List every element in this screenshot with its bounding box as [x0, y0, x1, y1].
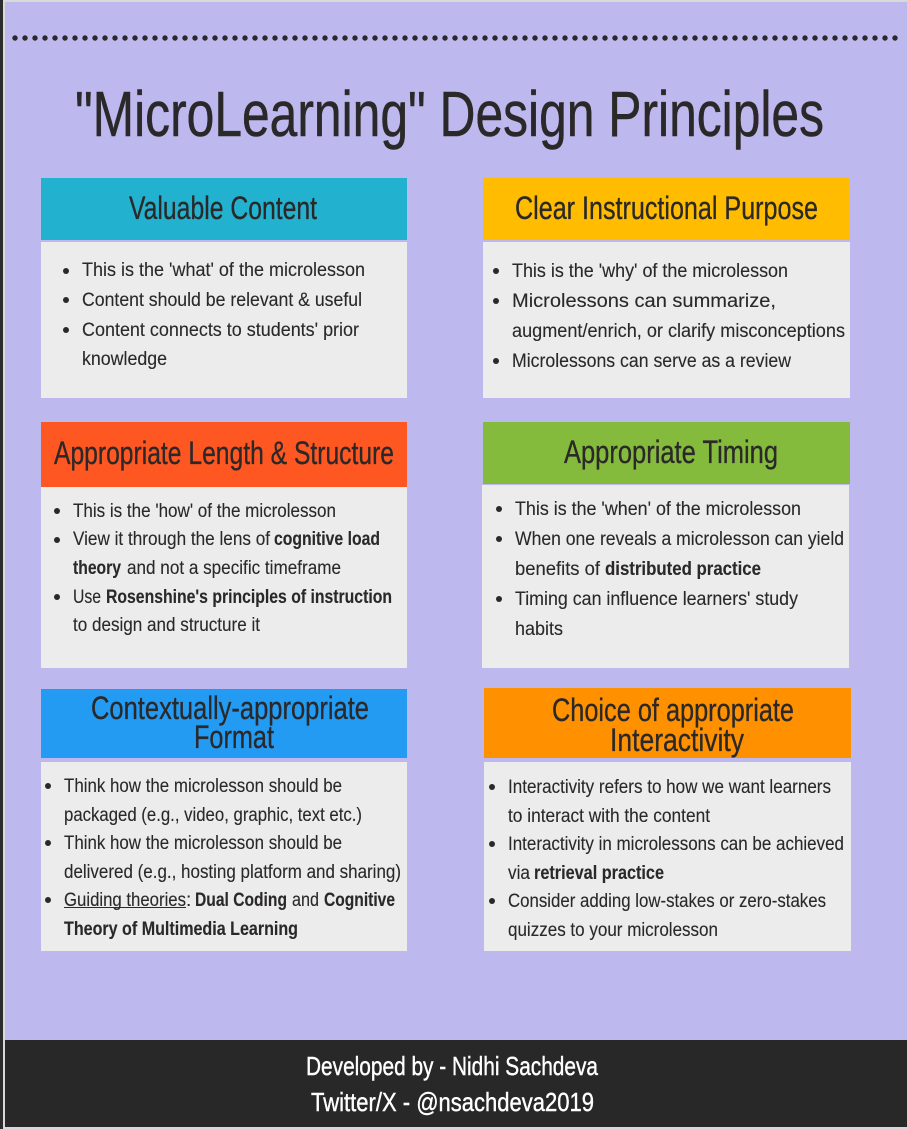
body: Clear Instructional Purpose: augment/enrich, or clarify misconceptions	[512, 321, 845, 342]
body: Appropriate Length & Structure	[41, 487, 407, 668]
body: Appropriate Length & Structure: Rosenshine's principles of instruction	[106, 587, 392, 608]
body: Contextually-appropriate Format: delivered (e.g., hosting platform and sharing)	[64, 862, 401, 883]
body: Appropriate Timing: When one reveals a microlesson can yield	[515, 529, 844, 550]
body: Appropriate Timing	[482, 485, 849, 668]
header: Valuable Content: Valuable Content	[129, 190, 317, 226]
header: Clear Instructional Purpose: Clear Instructional Purpose	[515, 190, 818, 226]
header: Clear Instructional Purpose	[483, 178, 850, 240]
header: Choice of appropriate Interactivity	[484, 688, 851, 758]
body: Choice of appropriate Interactivity: retrieval practice	[534, 863, 664, 884]
header: Contextually-appropriate Format: Format	[194, 719, 274, 755]
body: Clear Instructional Purpose: This is the 'why' of the microlesson	[512, 261, 788, 282]
header: Appropriate Timing	[483, 422, 850, 484]
body: Contextually-appropriate Format: Theory of Multimedia Learning	[64, 919, 298, 940]
body: Contextually-appropriate Format: and	[292, 890, 319, 911]
body: Contextually-appropriate Format: packaged (e.g., video, graphic, text etc.)	[64, 805, 362, 826]
panel: Valuable Content	[41, 178, 407, 398]
body: Contextually-appropriate Format: Think how the microlesson should be	[64, 776, 342, 797]
header: Contextually-appropriate Format: Contextually-appropriate	[91, 690, 369, 726]
footer: credits: Twitter/X - @nsachdeva2019	[311, 1087, 594, 1117]
body: Contextually-appropriate Format: Cognitive	[324, 890, 395, 911]
footer: credits	[5, 1040, 907, 1127]
body: Choice of appropriate Interactivity: Consider adding low-stakes or zero-stakes	[508, 891, 826, 912]
header: Appropriate Timing: Appropriate Timing	[564, 434, 778, 470]
body: Contextually-appropriate Format: Dual Coding	[195, 890, 287, 911]
body: Choice of appropriate Interactivity: Interactivity in microlessons can be achieved	[508, 834, 844, 855]
header: Choice of appropriate Interactivity: Interactivity	[610, 722, 744, 758]
dotted top rule	[15, 35, 897, 41]
body: Valuable Content	[41, 242, 407, 398]
body: Appropriate Timing: This is the 'when' of the microlesson	[515, 499, 801, 520]
body: Valuable Content: This is the 'what' of the microlesson	[82, 260, 365, 281]
footer: credits: Developed by - Nidhi Sachdeva	[306, 1051, 598, 1081]
body: Valuable Content: Content connects to students' prior	[82, 320, 360, 341]
panel: Appropriate Length & Structure	[41, 422, 407, 668]
body: Contextually-appropriate Format: Think how the microlesson should be	[64, 833, 342, 854]
header: Appropriate Length & Structure	[41, 422, 407, 487]
body: Appropriate Length & Structure: cognitive load	[274, 529, 380, 550]
body: Appropriate Length & Structure: This is the 'how' of the microlesson	[73, 501, 336, 522]
body: Appropriate Length & Structure: to design and structure it	[73, 615, 261, 636]
body: Valuable Content: knowledge	[82, 349, 167, 370]
body: Choice of appropriate Interactivity	[484, 762, 851, 951]
body: Appropriate Length & Structure: Use	[73, 587, 101, 608]
body: Appropriate Timing: distributed practice	[605, 559, 761, 580]
header: Contextually-appropriate Format	[41, 689, 407, 758]
header: Choice of appropriate Interactivity: Choice of appropriate	[552, 692, 794, 728]
body: Clear Instructional Purpose: Microlessons can summarize,	[512, 291, 776, 312]
body: Clear Instructional Purpose	[483, 242, 850, 398]
panel: Clear Instructional Purpose	[483, 178, 850, 398]
body: Appropriate Length & Structure: View it through the lens of	[73, 529, 271, 550]
body: Choice of appropriate Interactivity: Interactivity refers to how we want learners	[508, 777, 831, 798]
body: Appropriate Timing: habits	[515, 619, 563, 640]
panel: Contextually-appropriate Format	[41, 689, 407, 951]
body: Contextually-appropriate Format: Guiding theories	[64, 890, 186, 911]
panel: Appropriate Timing	[482, 422, 850, 668]
header: Appropriate Length & Structure: Appropriate Length & Structure	[54, 435, 394, 471]
header: Valuable Content	[41, 178, 407, 240]
body: Appropriate Length & Structure: and not a specific timeframe	[127, 558, 341, 579]
body: Appropriate Timing: Timing can influence learners' study	[515, 589, 798, 610]
body: Choice of appropriate Interactivity: to interact with the content	[508, 806, 711, 827]
body: Appropriate Timing: benefits of	[515, 559, 601, 580]
body: Contextually-appropriate Format	[41, 762, 407, 951]
body: Valuable Content: Content should be relevant & useful	[82, 290, 362, 311]
body: Choice of appropriate Interactivity: quizzes to your microlesson	[508, 920, 718, 941]
panel: Choice of appropriate Interactivity	[484, 688, 851, 951]
body: Contextually-appropriate Format: :	[186, 890, 191, 911]
body: Choice of appropriate Interactivity: via	[508, 863, 530, 884]
body: Appropriate Length & Structure: theory	[73, 558, 121, 579]
body: Clear Instructional Purpose: Microlessons can serve as a review	[512, 351, 791, 372]
